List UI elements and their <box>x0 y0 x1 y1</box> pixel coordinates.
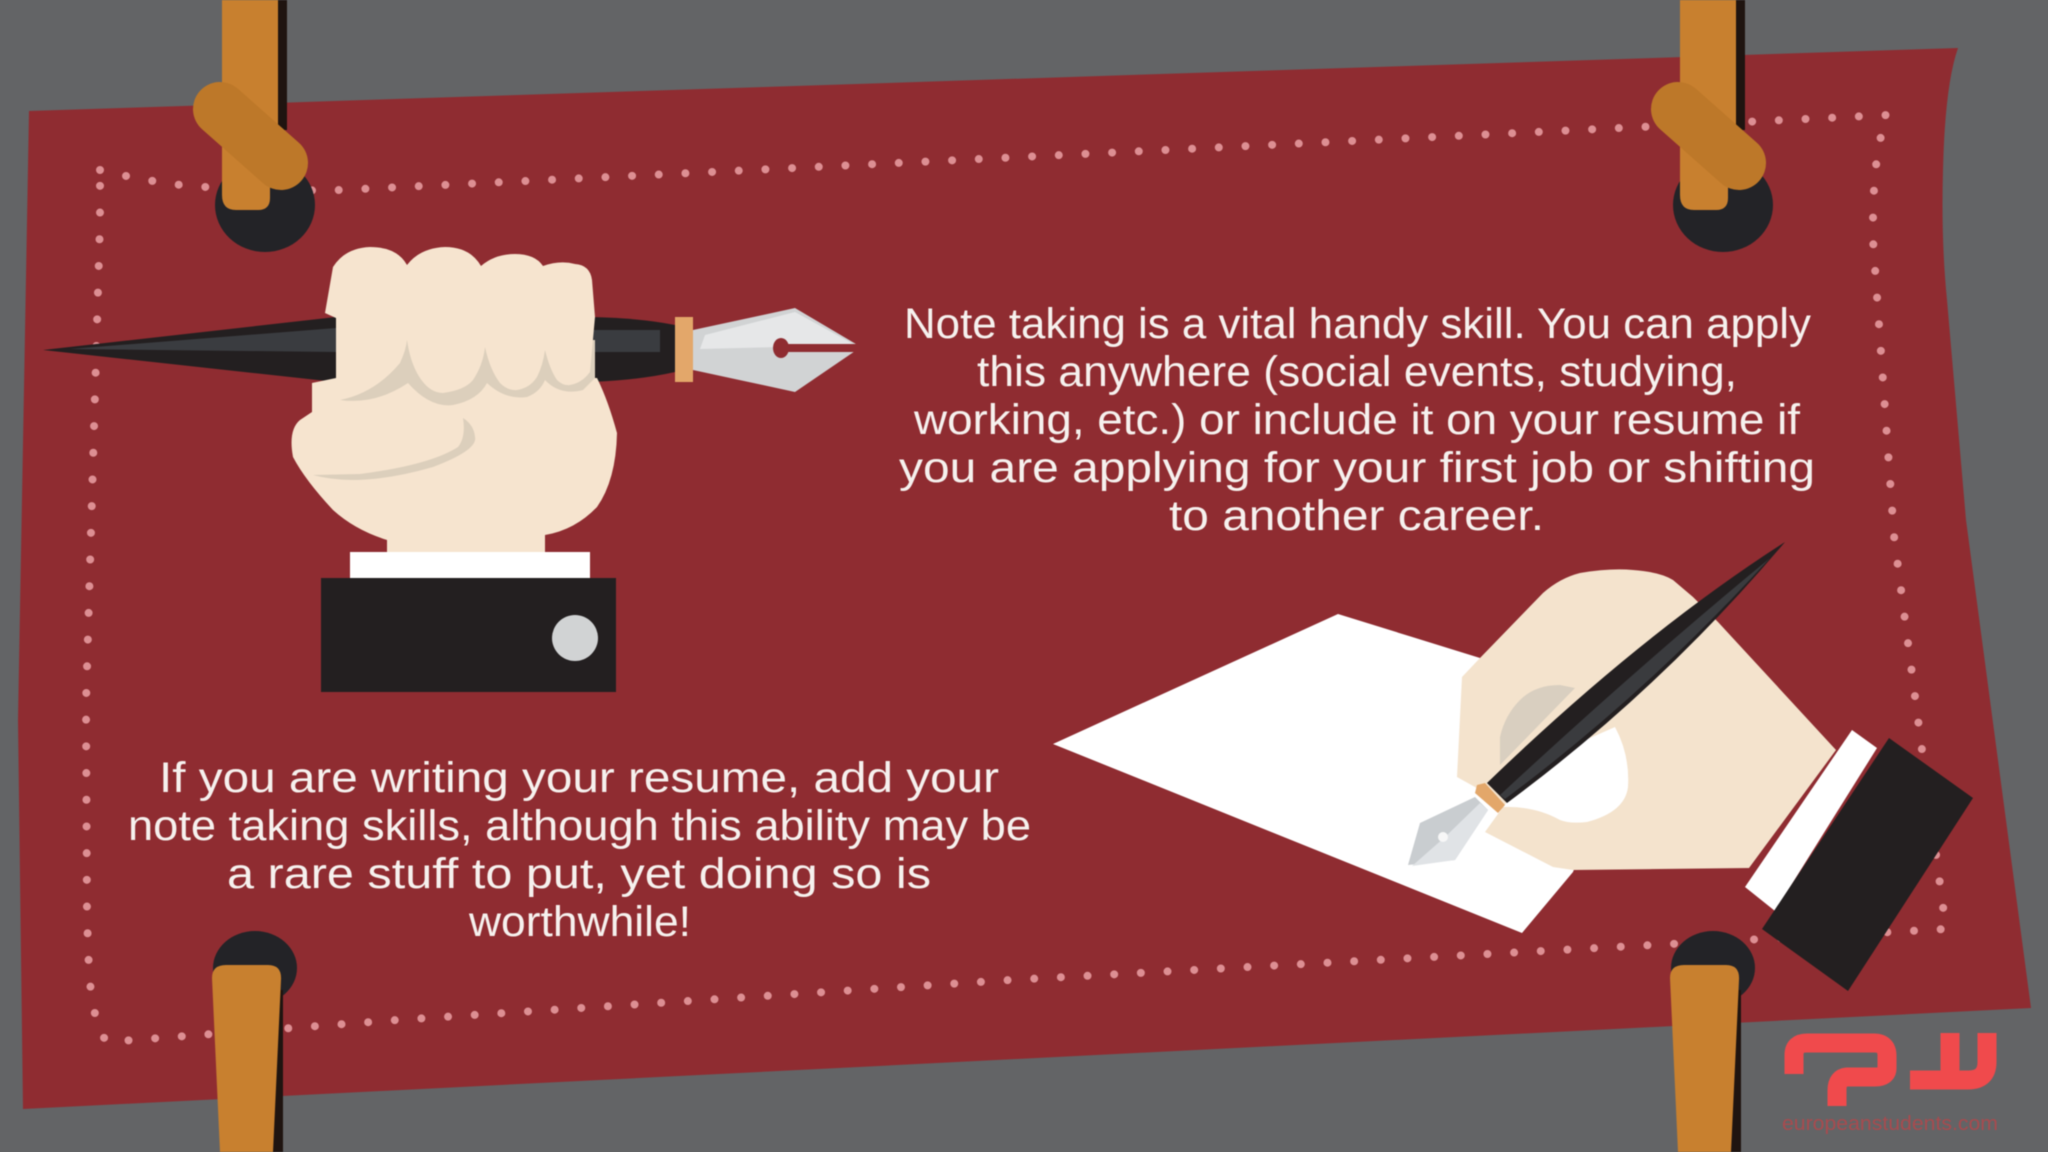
text block: bottom paragraph: a rare stuff to put, yet doing so is <box>227 850 931 898</box>
shirt cuff <box>350 552 590 578</box>
hand: thumb shadow <box>313 418 475 480</box>
strap: bottom right <box>1670 931 1755 1152</box>
text block: top paragraph: this anywhere (social events, studying, <box>977 348 1737 396</box>
pen: nib <box>1408 797 1488 866</box>
logo mark <box>1794 1033 1987 1106</box>
logo <box>1782 1033 1998 1135</box>
hand: palm <box>292 378 617 552</box>
hand: gap between fingers <box>1503 727 1628 823</box>
hand: fingers <box>325 247 595 400</box>
pen: barrel <box>1487 542 1785 803</box>
jacket sleeve <box>321 578 616 692</box>
text block: top paragraph: Note taking is a vital handy skill. You can apply <box>904 300 1811 348</box>
pen: gold ring <box>1475 783 1505 813</box>
illustration: fist holding pen <box>43 247 861 692</box>
dotted stitched border <box>86 115 1946 1042</box>
pen: nib <box>693 308 861 392</box>
strap: bottom left <box>212 931 297 1152</box>
hand: finger shadows <box>340 340 595 405</box>
strap: top left <box>215 0 315 252</box>
text block: bottom paragraph <box>128 754 1031 946</box>
hand: thumb shadow <box>1500 685 1575 765</box>
text block: bottom paragraph: If you are writing your resume, add your <box>159 754 999 802</box>
illustration: hand writing on paper <box>1053 542 1973 991</box>
pen: gold ring <box>675 317 693 382</box>
hand <box>1457 569 1836 870</box>
text block: top paragraph: you are applying for your first job or shifting <box>899 444 1815 492</box>
text block: top paragraph: working, etc.) or include it on your resume if <box>913 396 1801 444</box>
paper sheet <box>1053 614 1600 933</box>
shirt cuff <box>1745 730 1877 911</box>
text block: bottom paragraph: worthwhile! <box>468 898 691 946</box>
sleeve button <box>552 615 598 661</box>
text block: top paragraph: to another career. <box>1169 492 1544 540</box>
logo wordmark: europeanstudents.com <box>1782 1113 1998 1135</box>
strap: top right <box>1673 0 1773 252</box>
text block: top paragraph <box>899 300 1815 540</box>
pen: barrel <box>43 317 675 382</box>
jacket sleeve <box>1762 738 1973 991</box>
text block: bottom paragraph: note taking skills, although this ability may be <box>128 802 1031 850</box>
